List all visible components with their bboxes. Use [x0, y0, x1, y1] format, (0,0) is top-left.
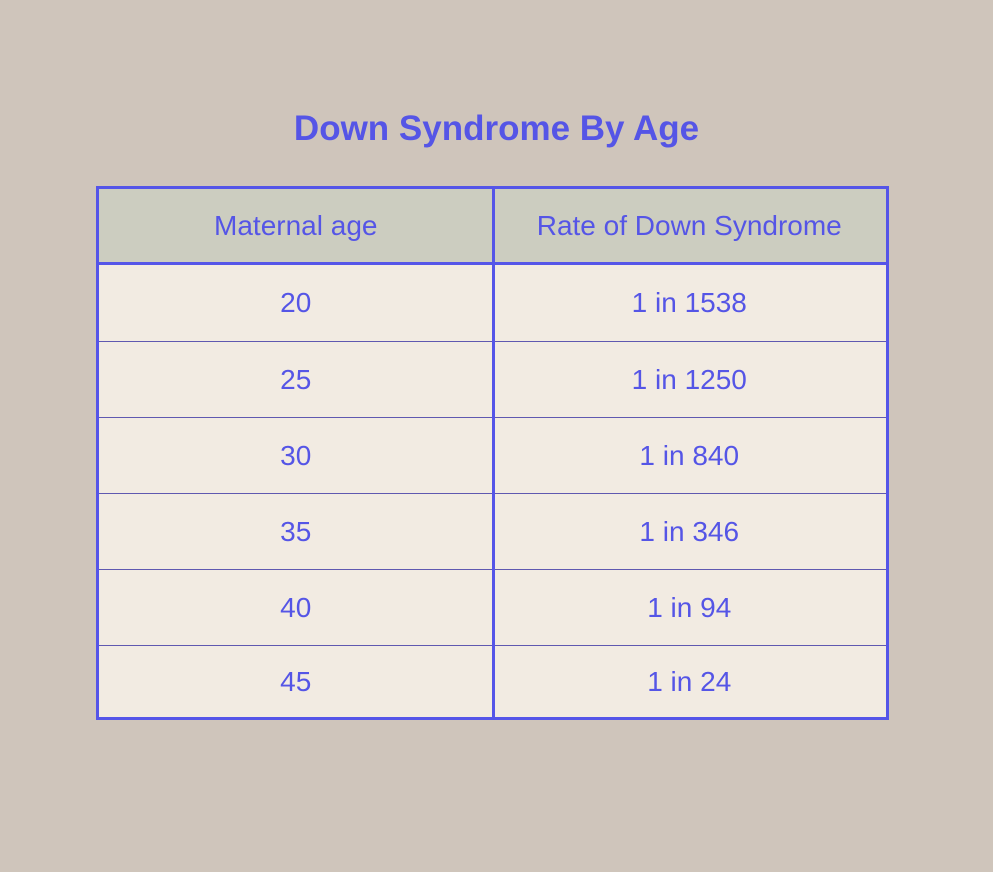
row 35 [280, 516, 739, 546]
row 20: 20 [280, 287, 311, 318]
row 40: 1 in 94 [647, 592, 731, 622]
row 40: 40 [280, 592, 311, 622]
row 45: 45 [280, 666, 311, 696]
row 30: 1 in 840 [639, 440, 739, 470]
table [96, 186, 889, 720]
row 45 [280, 666, 731, 696]
header row [99, 189, 886, 265]
row 35: 1 in 346 [639, 516, 739, 546]
row 30 [280, 440, 739, 470]
row 40 [280, 592, 731, 622]
row 25 [280, 364, 747, 394]
row 20 [280, 287, 747, 318]
title: Down Syndrome By Age [294, 109, 699, 148]
row 25: 25 [280, 364, 311, 394]
row 25: 1 in 1250 [632, 364, 747, 394]
row 45: 1 in 24 [647, 666, 731, 696]
row 35: 35 [280, 516, 311, 546]
row 20: 1 in 1538 [632, 287, 747, 318]
header row: Rate of Down Syndrome [537, 210, 842, 240]
header row: Maternal age [214, 210, 377, 240]
row 30: 30 [280, 440, 311, 470]
